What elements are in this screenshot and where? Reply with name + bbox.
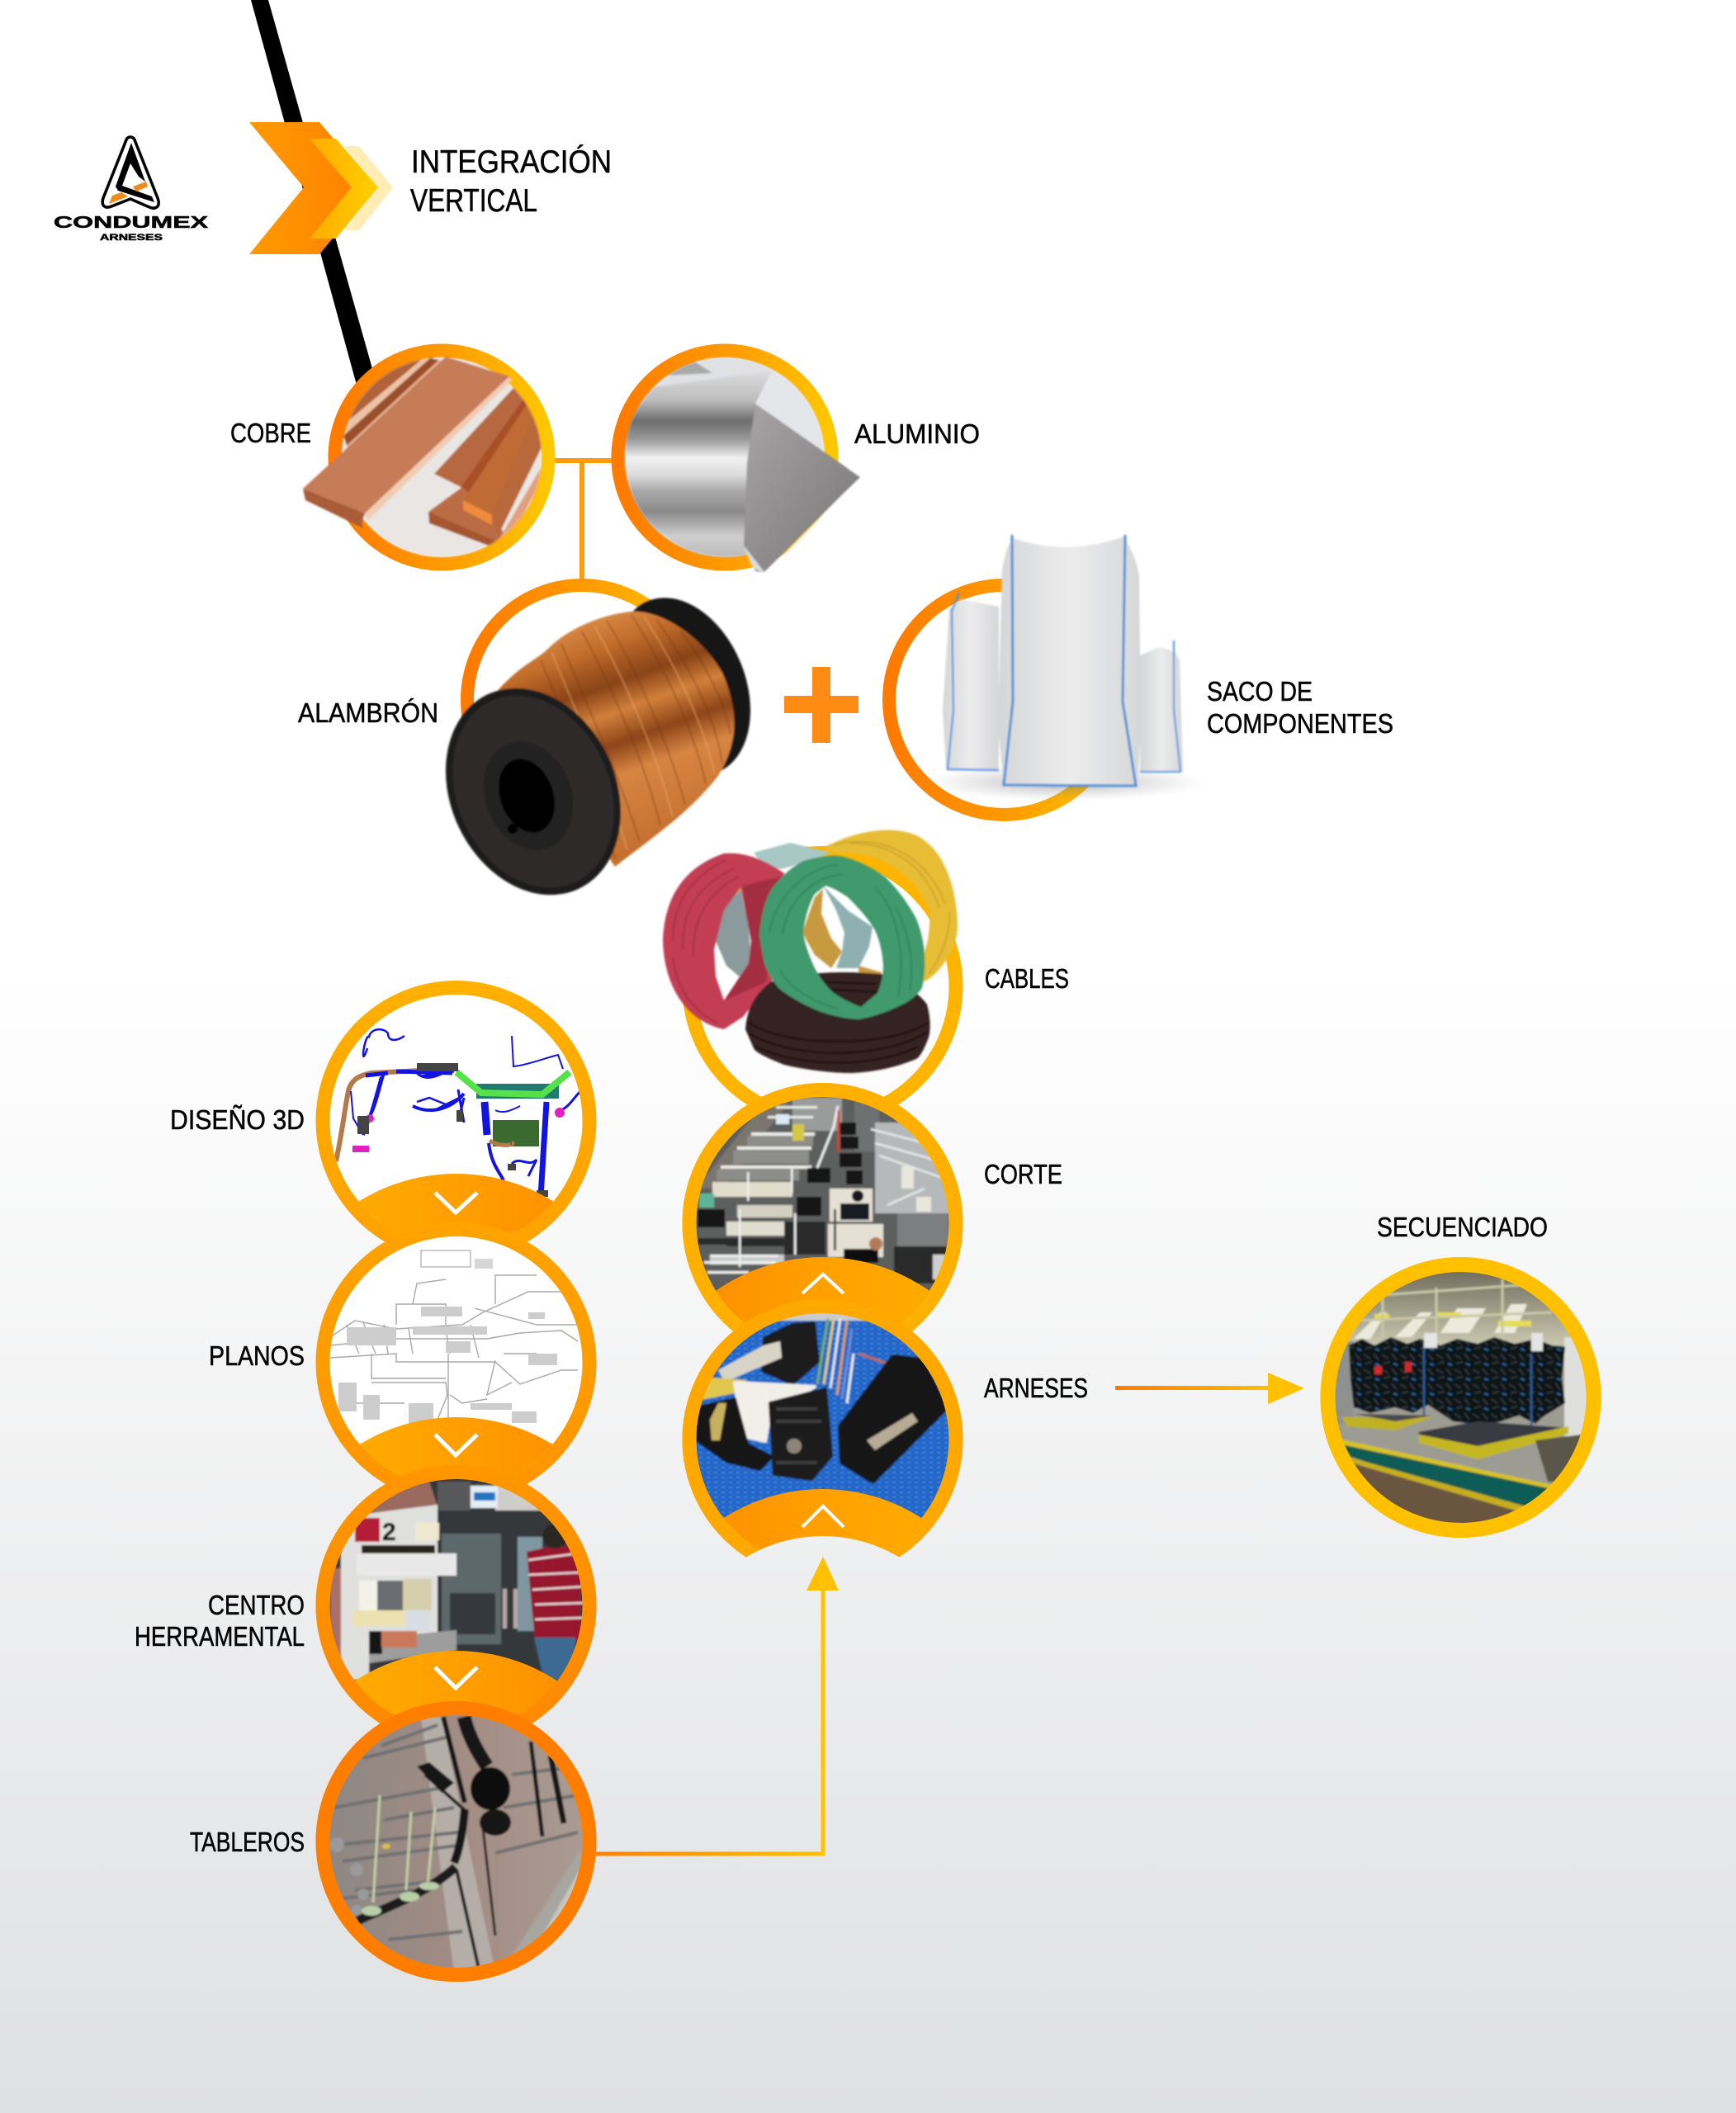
title: VERTICAL <box>410 183 537 219</box>
photo: assembly boards <box>326 1713 590 1981</box>
panel: saco de componentes <box>889 535 1205 815</box>
ring <box>618 351 831 564</box>
black diagonal line <box>251 0 373 388</box>
title <box>410 144 612 219</box>
label: cobre: COBRE <box>230 418 311 448</box>
ring <box>315 981 596 1261</box>
panel: corte <box>682 1083 963 1331</box>
ring outline <box>689 1090 956 1357</box>
chevron arrow icon <box>249 122 393 254</box>
photo: coloured cable coils <box>663 830 958 1073</box>
band with down chevron <box>355 1651 557 1715</box>
label: secuenciado: SECUENCIADO <box>1377 1212 1548 1242</box>
panel: cables <box>663 830 958 1119</box>
ring <box>889 585 1119 815</box>
band with down chevron <box>360 1417 553 1476</box>
photo: copper bars <box>303 354 551 561</box>
ring <box>467 585 697 815</box>
title: INTEGRACIÓN <box>411 144 612 180</box>
band with down chevron <box>358 1174 553 1234</box>
panel: planos <box>315 1226 596 1484</box>
label: saco de componentes: SACO DE <box>1207 676 1313 707</box>
label: diseño 3D: DISEÑO 3D <box>170 1104 305 1135</box>
photo: sequencing carts <box>1336 1272 1587 1523</box>
label: saco de componentes <box>1207 676 1393 739</box>
photo: CNC workshop: 2 <box>382 1519 396 1546</box>
ring <box>315 1222 596 1503</box>
photo: copper wire spool <box>413 578 775 924</box>
ring outline <box>689 1306 956 1573</box>
panel: alambrón <box>413 578 775 924</box>
band with up chevron <box>716 1257 929 1322</box>
plus sign <box>784 667 859 743</box>
panel: cobre <box>303 351 551 564</box>
label: corte: CORTE <box>984 1159 1062 1189</box>
image: technical drawing <box>330 1250 578 1476</box>
ring <box>682 1331 963 1557</box>
image: 3D harness design <box>335 1028 579 1234</box>
ring outline <box>323 1709 589 1974</box>
label: centro herramental: CENTRO <box>208 1590 305 1620</box>
logo: Condumex Arneses: CONDUMEX <box>54 214 209 232</box>
connector: cobre and aluminio to alambrón <box>553 458 614 582</box>
photo: wire harness connectors <box>697 1313 949 1550</box>
photo: CNC workshop <box>330 1479 583 1715</box>
band with up chevron <box>724 1489 921 1550</box>
ring <box>682 1083 963 1364</box>
label: centro herramental: HERRAMENTAL <box>135 1621 305 1652</box>
logo: Condumex Arneses <box>54 137 209 243</box>
label: centro herramental <box>135 1590 305 1652</box>
arrow: arneses to secuenciado <box>1115 1373 1304 1404</box>
label: planos: PLANOS <box>209 1340 305 1371</box>
label: arneses: ARNESES <box>984 1373 1088 1403</box>
panel: secuenciado <box>1321 1257 1601 1538</box>
photo: aluminium sheet <box>619 355 860 578</box>
ring <box>335 351 548 564</box>
label: cables: CABLES <box>985 963 1069 994</box>
ring <box>689 853 956 1119</box>
panel: tableros <box>315 1701 596 1982</box>
ring <box>315 1701 596 1982</box>
label: alambrón: ALAMBRÓN <box>298 697 438 728</box>
logo: Condumex Arneses: ARNESES <box>100 233 163 243</box>
arrow: tableros to arneses <box>596 1557 839 1854</box>
photo: bulk bags <box>925 535 1205 801</box>
ring outline <box>323 1472 589 1738</box>
panel: centro herramental <box>315 1465 596 1723</box>
label: saco de componentes: COMPONENTES <box>1207 708 1393 739</box>
label: tableros: TABLEROS <box>190 1827 305 1857</box>
panel: diseño 3D <box>315 981 596 1241</box>
ring <box>1321 1257 1601 1538</box>
panel: aluminio <box>618 351 860 578</box>
label: aluminio: ALUMINIO <box>854 418 980 449</box>
photo: cutting plant <box>697 1097 949 1322</box>
panel: arneses <box>682 1299 963 1557</box>
ring <box>315 1465 596 1746</box>
ring outline <box>1327 1264 1593 1530</box>
